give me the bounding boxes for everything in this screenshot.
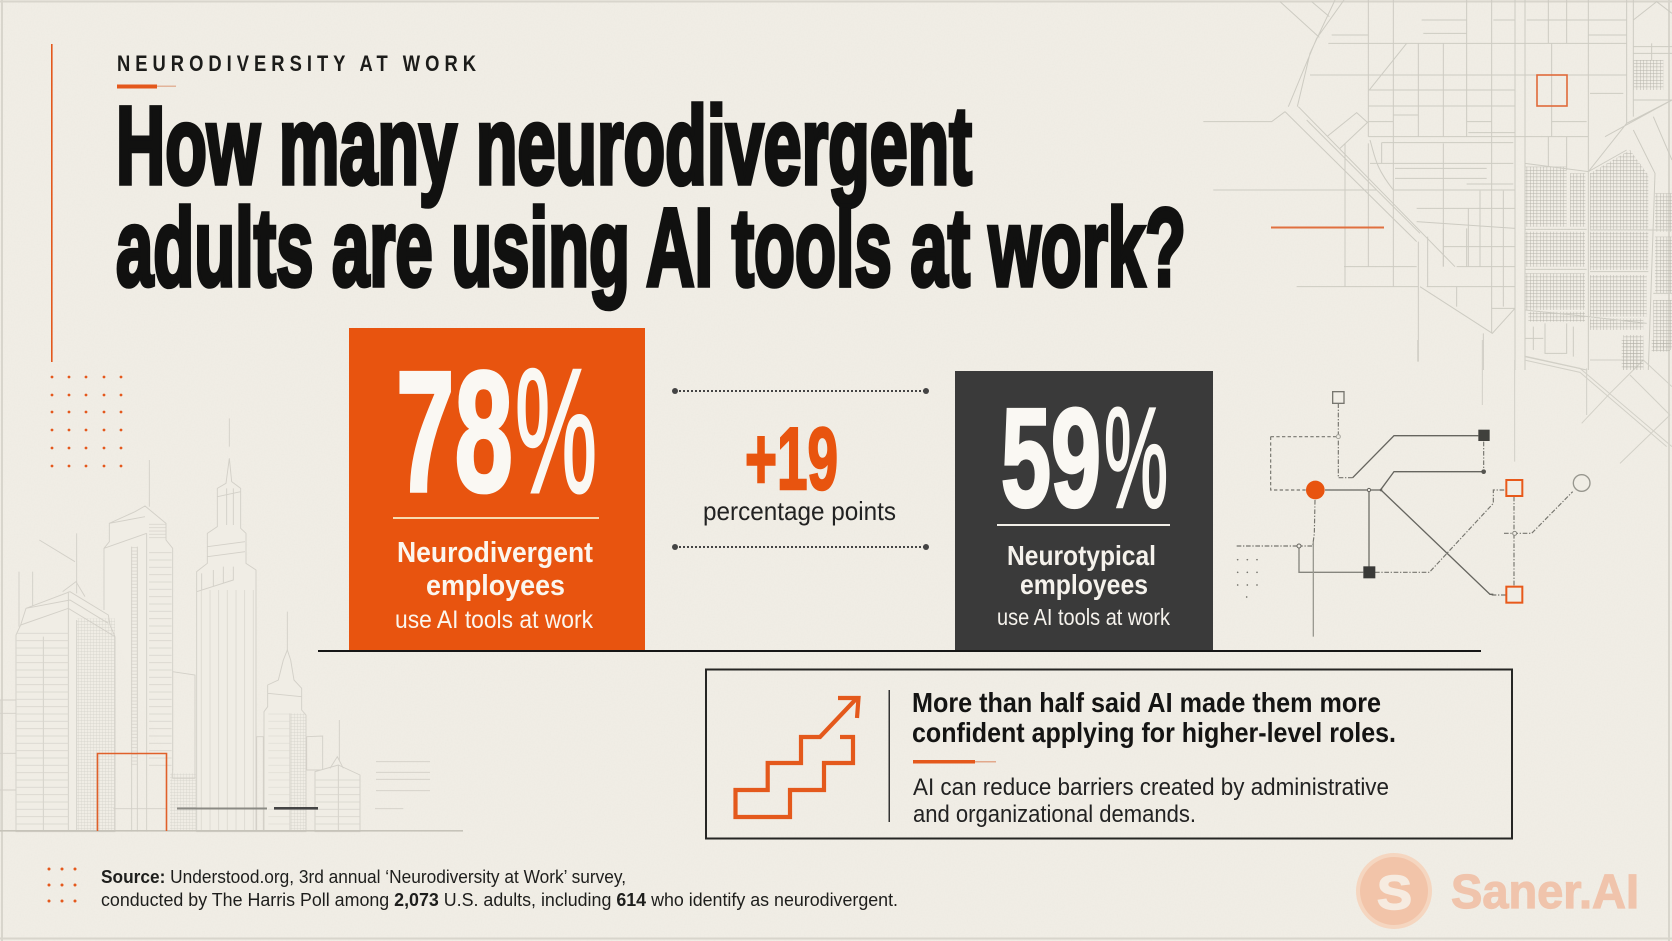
stat label: neurotypical bbox=[997, 540, 1170, 630]
dotted connector bottom bbox=[672, 544, 929, 550]
stat label: neurotypical: use AI tools at work bbox=[997, 604, 1170, 630]
difference label: percentage points bbox=[703, 496, 896, 526]
callout heading: confident applying for higher-level roles. bbox=[912, 717, 1396, 748]
difference callout bbox=[672, 388, 929, 550]
stat value: 78%: 78 bbox=[396, 336, 513, 528]
stat label: neurotypical: employees bbox=[1020, 569, 1148, 600]
callout body: and organizational demands. bbox=[913, 801, 1196, 828]
source note: Source: Understood.org, 3rd annual ‘Neurodiversity at Work’ survey, bbox=[101, 867, 626, 887]
stat label: neurodivergent: employees bbox=[426, 570, 565, 602]
panel: neurotypical stat bbox=[955, 371, 1213, 651]
stat label: neurotypical: Neurotypical bbox=[1007, 540, 1156, 571]
logo mark bbox=[1356, 853, 1432, 929]
icon: rising stairs with arrow bbox=[736, 698, 858, 817]
chart baseline bbox=[318, 650, 1481, 652]
stat rule bbox=[393, 517, 599, 519]
logo mark: S bbox=[1377, 867, 1412, 920]
callout body: AI can reduce barriers created by administrative bbox=[913, 774, 1389, 801]
node: orange hub bbox=[1306, 481, 1325, 499]
node: open circle bbox=[1573, 475, 1590, 491]
accent: map square bbox=[1537, 75, 1567, 106]
panel: confidence callout bbox=[706, 670, 1512, 838]
accent: orange frame bbox=[98, 754, 166, 831]
node: orange square bottom bbox=[1506, 587, 1522, 603]
stat rule bbox=[997, 524, 1170, 526]
orange dot grid bbox=[51, 376, 122, 467]
background: lower street map bbox=[1418, 340, 1672, 463]
node: dark square bottom bbox=[1363, 566, 1375, 578]
callout divider bbox=[888, 690, 890, 822]
stat value: 78%: % bbox=[515, 332, 597, 530]
eyebrow heading: NEURODIVERSITY AT WORK bbox=[117, 51, 481, 76]
stat label: neurodivergent bbox=[395, 537, 593, 634]
eyebrow accent rule bbox=[117, 84, 176, 88]
accent: gray bars bbox=[177, 807, 318, 810]
difference value: +19 bbox=[745, 409, 838, 508]
node: white square bbox=[1333, 392, 1344, 403]
stat label: neurodivergent: Neurodivergent bbox=[397, 537, 593, 569]
source dots bbox=[48, 868, 76, 902]
callout accent rule bbox=[913, 760, 996, 764]
title bbox=[116, 85, 1186, 310]
orange vertical rule bbox=[51, 44, 53, 362]
background: city street map bbox=[1203, 0, 1672, 370]
panel: neurodivergent stat bbox=[349, 328, 645, 651]
callout heading: More than half said AI made them more bbox=[912, 687, 1381, 718]
stat label: neurodivergent: use AI tools at work bbox=[395, 606, 593, 634]
network diagram bbox=[1237, 392, 1590, 637]
node: dark square top bbox=[1478, 430, 1490, 441]
source note bbox=[101, 867, 898, 910]
stat value: 59%: 59 bbox=[1001, 379, 1101, 536]
background: skyline illustration bbox=[0, 418, 430, 832]
callout heading bbox=[912, 687, 1396, 748]
node: small dot bbox=[1481, 469, 1486, 474]
node: orange square top bbox=[1506, 480, 1522, 496]
accent: map line bbox=[1271, 226, 1384, 228]
title: How many neurodivergent bbox=[116, 85, 972, 208]
source note: conducted by The Harris Poll among 2,073 U.S. adults, including 614 who identify as neurodivergent. bbox=[101, 890, 898, 910]
logo wordmark: Saner.AI bbox=[1451, 866, 1639, 919]
callout body bbox=[913, 774, 1389, 828]
logo: Saner.AI watermark bbox=[1356, 853, 1639, 929]
stat value: 59%: % bbox=[1104, 379, 1168, 538]
skyline ground line bbox=[0, 830, 463, 832]
dotted connector top bbox=[672, 388, 929, 394]
